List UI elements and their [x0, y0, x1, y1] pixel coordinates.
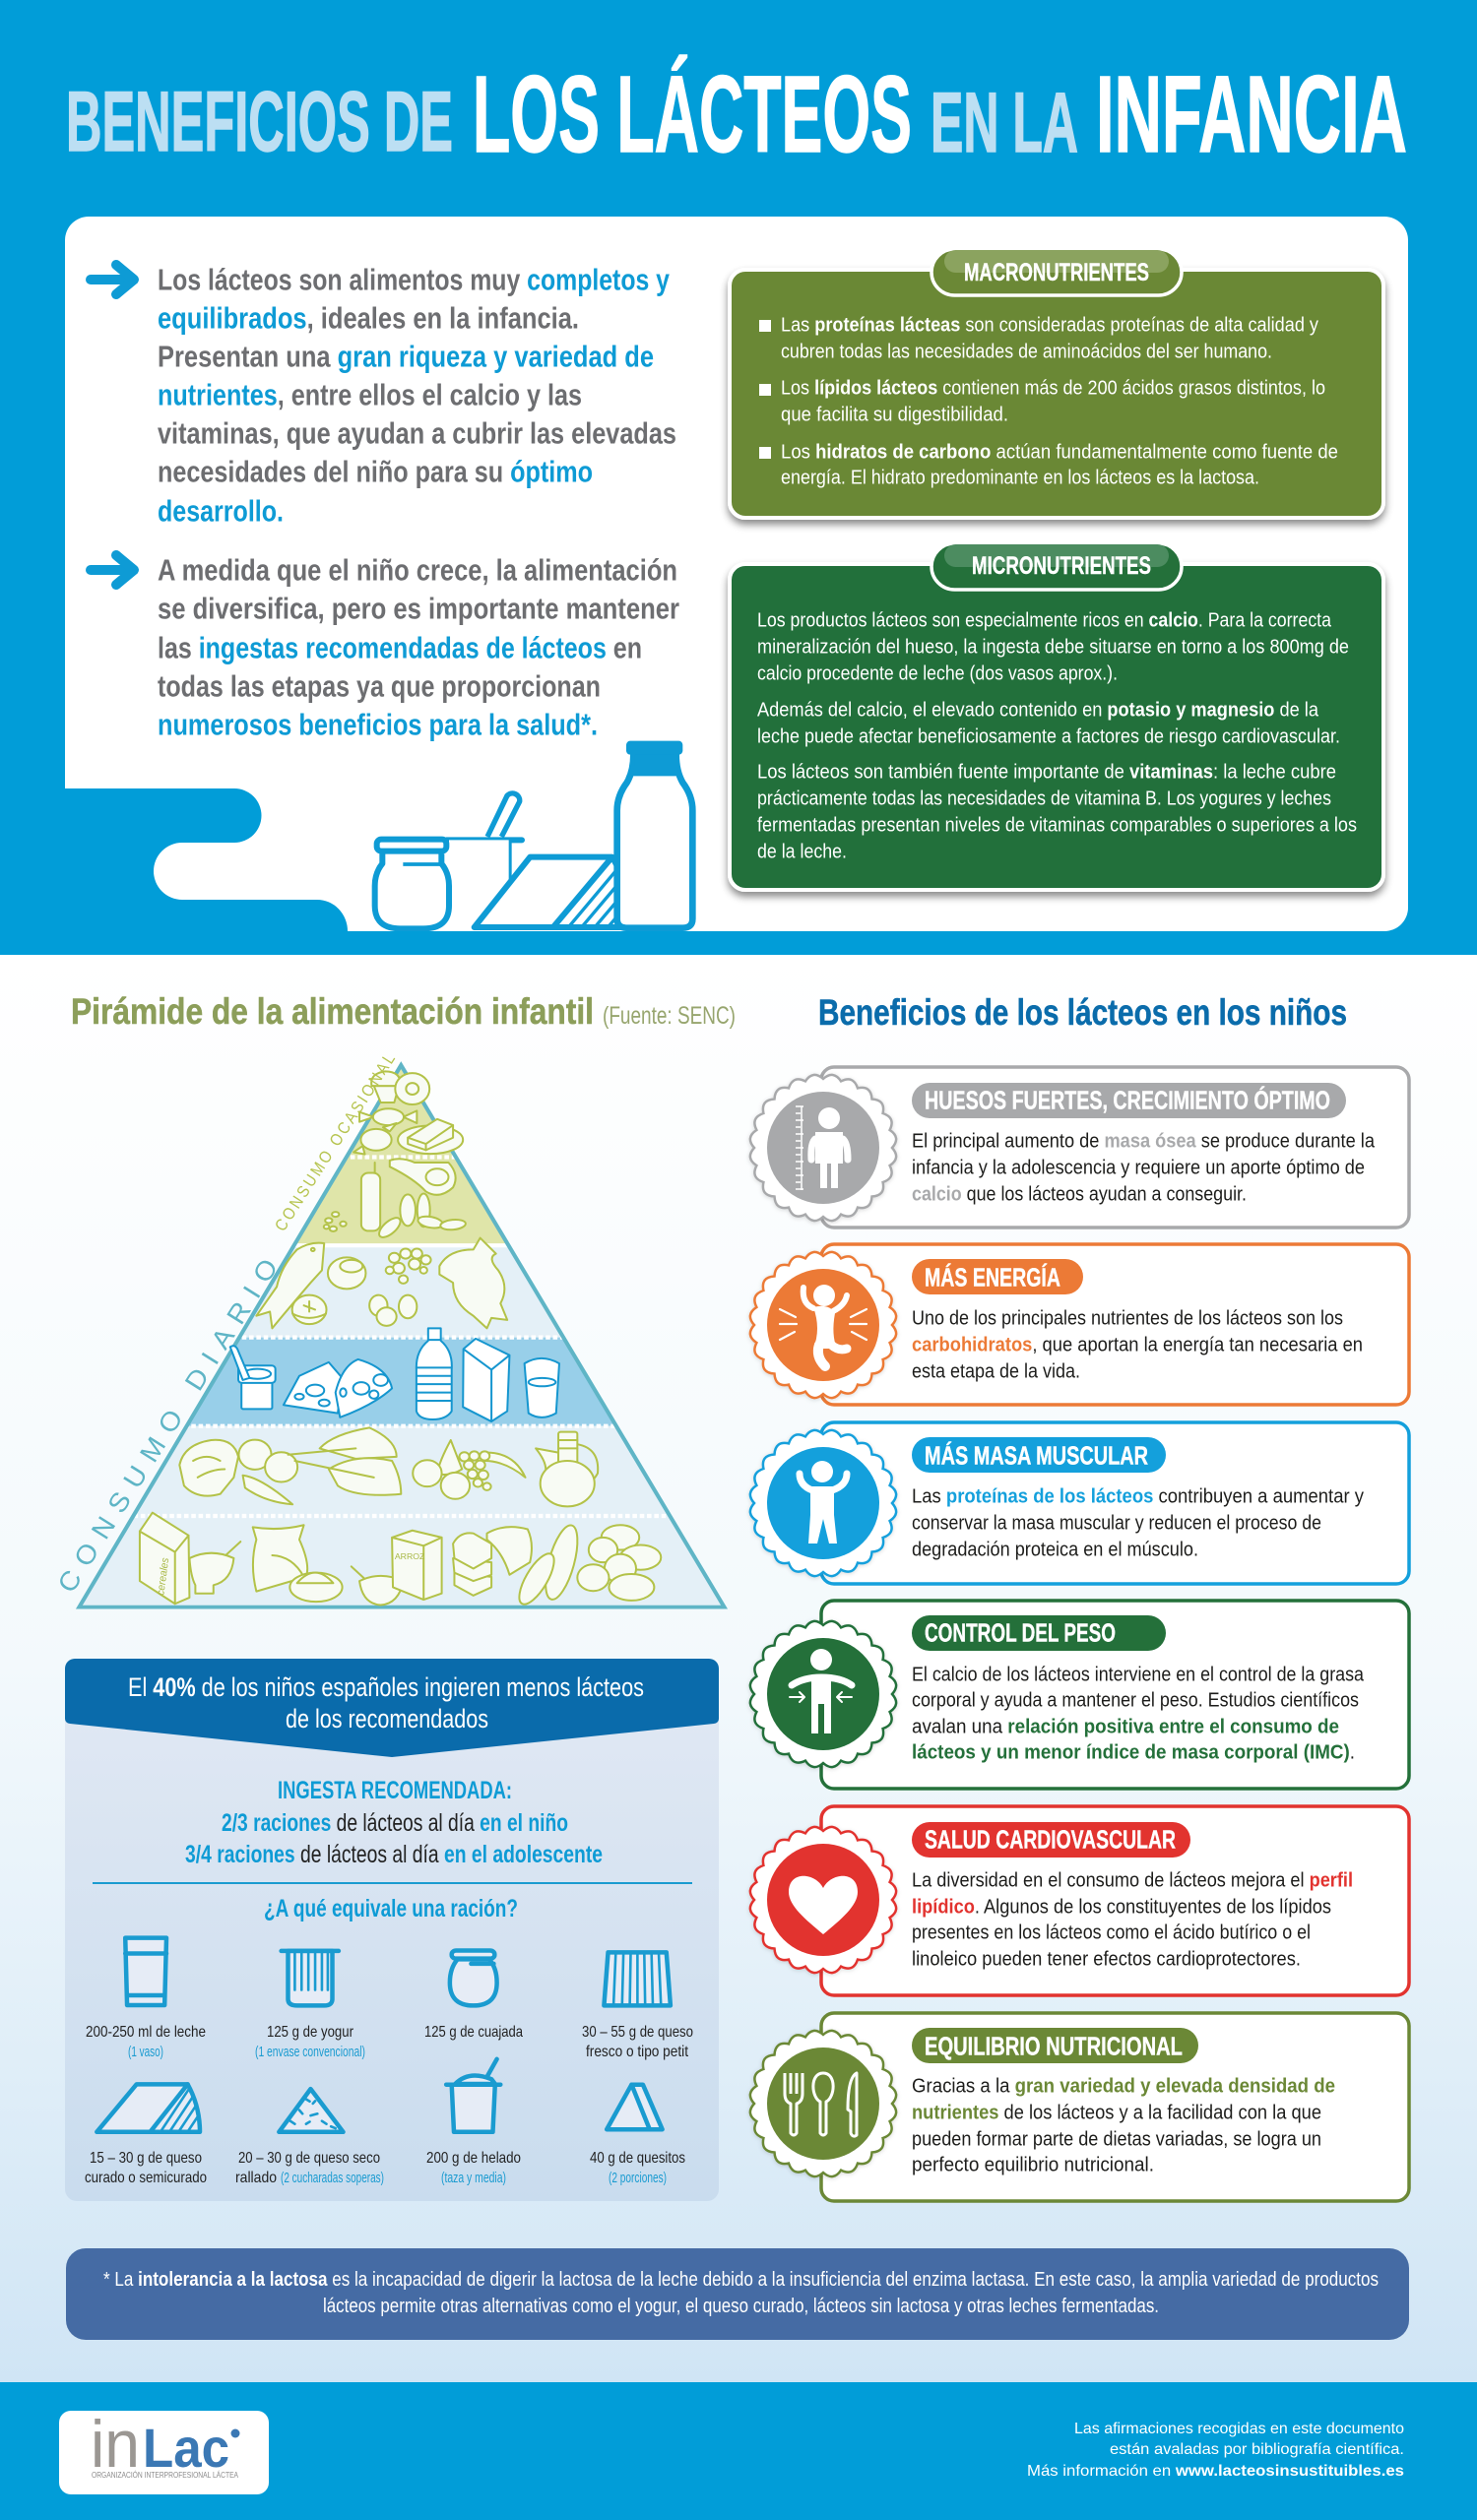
badge: corazón: [750, 1827, 896, 1973]
pill: muscular: [912, 1437, 1166, 1473]
label: consumo diario: CONSUMO DIARIO: [52, 1245, 289, 1598]
pill: peso: CONTROL DEL PESO: [925, 1617, 1116, 1647]
icon: jar: [450, 1951, 497, 2005]
serving labels: (2 cucharadas soperas): [281, 2170, 384, 2186]
heading: ración: ¿A qué equivale una ración?: [264, 1895, 518, 1922]
pill: cardiovascular: SALUD CARDIOVASCULAR: [925, 1824, 1176, 1854]
title: EN LA: [931, 76, 1078, 170]
icon: yogurt: [282, 1951, 339, 2005]
micronutrientes text: de la leche.: [757, 841, 847, 862]
text: energía: esta etapa de la vida.: [912, 1360, 1080, 1382]
text: huesos: [912, 1130, 1376, 1205]
pill: huesos: [912, 1083, 1346, 1118]
logo: inlac: ORGANIZACIÓN INTERPROFESIONAL LÁCTEA: [92, 2471, 239, 2480]
icon: grated cheese: [279, 2089, 344, 2132]
micronutrientes text: Además del calcio, el elevado contenido en potasio y magnesio de la: [757, 699, 1319, 721]
card: huesos fuertes: [750, 1067, 1409, 1228]
label: cereales box: cereales: [155, 1556, 172, 1596]
badge: huesos: [750, 1075, 896, 1221]
macronutrientes list: que facilita su digestibilidad.: [781, 404, 1008, 425]
micronutrientes text: calcio procedente de leche (dos vasos aprox.).: [757, 663, 1118, 685]
icon: quesito: [607, 2085, 663, 2129]
serving labels: 20 – 30 g de queso seco: [238, 2150, 380, 2167]
intro paragraph two: [158, 553, 679, 742]
text: energía: Uno de los principales nutrientes de los lácteos son los: [912, 1307, 1343, 1329]
label: consumo ocasional: CONSUMO OCASIONAL: [271, 1048, 400, 1234]
pill: cardiovascular: [912, 1822, 1190, 1858]
pill: micronutrientes: MICRONUTRIENTES: [972, 552, 1151, 580]
logo: inlac: Lac: [143, 2417, 229, 2479]
macronutrientes list: [759, 315, 1338, 488]
badge: peso: [750, 1621, 896, 1767]
text: muscular: [912, 1486, 1364, 1561]
text: equilibrio: Gracias a la gran variedad y elevada densidad de: [912, 2075, 1335, 2097]
banner: 40%: El 40% de los niños españoles ingieren menos lácteos: [128, 1672, 644, 1702]
pill: macronutrientes: MACRONUTRIENTES: [964, 259, 1149, 286]
text: cardiovascular: lipídico. Algunos de los constituyentes de los lípidos: [912, 1896, 1331, 1918]
text: huesos: infancia y la adolescencia y requiere un aporte óptimo de: [912, 1158, 1365, 1179]
icon: arrow one: [91, 265, 134, 294]
micronutrientes text: prácticamente todas las necesidades de vitamina B. Los yogures y leches: [757, 788, 1331, 809]
heading: pirámide: (Fuente: SENC): [603, 1002, 736, 1030]
macronutrientes list: Las proteínas lácteas son consideradas proteínas de alta calidad y: [781, 315, 1318, 337]
title: LOS LÁCTEOS: [473, 54, 912, 175]
heading: pirámide: Pirámide de la alimentación infantil: [71, 991, 594, 1032]
foods: fish, eggs, poultry: [256, 1238, 507, 1328]
serving icons: [96, 1938, 671, 2134]
text: muscular: conservar la masa muscular y reducen el proceso de: [912, 1512, 1321, 1534]
text: cardiovascular: presentes en los lácteos como el ácido butírico o el: [912, 1922, 1311, 1943]
text: peso: corporal y ayuda a mantener el peso. Estudios científicos: [912, 1689, 1359, 1711]
serving labels: 200 g de helado: [426, 2150, 521, 2167]
footer note: Más información en www.lacteosinsustituibles.es: [1027, 2463, 1404, 2480]
badge: muscular: [750, 1430, 896, 1576]
text: cardiovascular: La diversidad en el consumo de lácteos mejora el perfil: [912, 1870, 1353, 1892]
serving labels: (1 envase convencional): [255, 2044, 365, 2060]
pill: muscular: MÁS MASA MUSCULAR: [925, 1440, 1148, 1470]
text: peso: El calcio de los lácteos interviene en el control de la grasa: [912, 1664, 1365, 1685]
micronutrientes text: leche puede afectar beneficiosamente a factores de riesgo cardiovascular.: [757, 726, 1340, 748]
text: peso: lácteos y un menor índice de masa corporal (IMC).: [912, 1742, 1355, 1764]
bottom edge fill under illustration: [345, 931, 1329, 955]
text: equilibrio: pueden formar parte de dietas variadas, se logra un: [912, 2128, 1321, 2150]
serving labels: 125 g de yogur: [267, 2024, 354, 2041]
pill: energía: MÁS ENERGÍA: [925, 1262, 1060, 1292]
card: control del peso: [750, 1601, 1409, 1789]
serving labels: rallado: [235, 2170, 277, 2186]
macronutrientes list: Los lípidos lácteos contienen más de 200 ácidos grasos distintos, lo: [781, 378, 1325, 400]
text: huesos: El principal aumento de masa ósea se produce durante la: [912, 1130, 1376, 1152]
intro paragraph two: numerosos beneficios para la salud*.: [158, 707, 598, 742]
text: equilibrio: perfecto equilibrio nutricional.: [912, 2154, 1154, 2175]
serving labels: fresco o tipo petit: [586, 2044, 688, 2060]
serving labels: [85, 2024, 693, 2186]
ingesta recomendada: INGESTA RECOMENDADA:: [278, 1777, 512, 1804]
icon: fresh cheese: [604, 1952, 671, 2005]
text: equilibrio: [912, 2075, 1335, 2175]
micronutrientes text: Los lácteos son también fuente importante de vitaminas: la leche cubre: [757, 762, 1336, 784]
chart: food pyramid: [39, 1063, 763, 1608]
intro paragraph two: A medida que el niño crece, la alimentación: [158, 553, 677, 587]
intro paragraph two: se diversifica, pero es importante mantener: [158, 591, 679, 626]
title: BENEFICIOS DE: [66, 75, 453, 169]
panel: intro white card: [65, 217, 1408, 931]
ingesta recomendada: [185, 1777, 603, 1868]
micronutrientes text: Los productos lácteos son especialmente ricos en calcio. Para la correcta: [757, 610, 1332, 632]
logo: inlac: in: [91, 2407, 140, 2482]
text: peso: [912, 1664, 1365, 1764]
pill: energía: [912, 1259, 1083, 1294]
callout: intolerancia a la lactosa: lácteos permite otras alternativas como el yogur, el queso curado, lácteos sin lactosa y otras leches fermentadas.: [323, 2296, 1159, 2317]
badge: energía: [750, 1252, 896, 1398]
intro paragraph one: [158, 262, 676, 528]
callout: intolerancia a la lactosa: [66, 2248, 1409, 2340]
card: equilibrio nutricional: [750, 2013, 1409, 2201]
text: energía: [912, 1307, 1363, 1382]
intro paragraph one: necesidades del niño para su óptimo: [158, 455, 593, 488]
text: muscular: Las proteínas de los lácteos contribuyen a aumentar y: [912, 1486, 1364, 1508]
pill: equilibrio: [912, 2028, 1198, 2063]
text: huesos: calcio que los lácteos ayudan a conseguir.: [912, 1183, 1247, 1205]
title: [66, 54, 1407, 175]
icon: ice cream cup: [446, 2059, 500, 2132]
intro paragraph two: todas las etapas ya que proporcionan: [158, 669, 601, 703]
footer note: Las afirmaciones recogidas en este documento: [1074, 2421, 1404, 2437]
footer note: [1027, 2421, 1404, 2480]
pill: equilibrio: EQUILIBRIO NUTRICIONAL: [925, 2031, 1183, 2060]
text: cardiovascular: [912, 1870, 1353, 1971]
text: muscular: degradación proteica en el músculo.: [912, 1540, 1198, 1561]
banner: 40%: [65, 1659, 719, 1757]
intro paragraph one: desarrollo.: [158, 494, 284, 528]
illustration: dairy products: [375, 741, 692, 932]
intro paragraph one: nutrientes, entre ellos el calcio y las: [158, 378, 582, 411]
intro paragraph one: vitaminas, que ayudan a cubrir las elevadas: [158, 415, 676, 451]
heading: beneficios: Beneficios de los lácteos en los niños: [818, 992, 1347, 1033]
macronutrientes list: cubren todas las necesidades de aminoácidos del ser humano.: [781, 341, 1272, 362]
foods: vegetables, fruit, oil: [179, 1427, 598, 1506]
decorative wave at panel bottom left: [65, 788, 348, 931]
footer band: [0, 2382, 1477, 2520]
serving labels: 15 – 30 g de queso: [90, 2150, 202, 2167]
micronutrientes text: [757, 610, 1357, 862]
pyramid bands: [83, 1069, 721, 1605]
foods: dairy: [230, 1328, 559, 1421]
foods: sweets and fats: [353, 1071, 463, 1155]
serving labels: 125 g de cuajada: [424, 2024, 523, 2041]
ingesta recomendada: 2/3 raciones de lácteos al día en el niño: [222, 1809, 568, 1837]
intro paragraph one: Presentan una gran riqueza y variedad de: [158, 339, 654, 374]
card: más energía: [750, 1244, 1409, 1405]
icon: wedge: [95, 2082, 203, 2134]
pill: macronutrientes: [931, 249, 1182, 295]
logo: inlac: [59, 2407, 269, 2494]
serving labels: 40 g de quesitos: [590, 2150, 685, 2167]
pill: huesos: HUESOS FUERTES, CRECIMIENTO ÓPTIMO: [925, 1085, 1330, 1114]
intro paragraph one: Los lácteos son alimentos muy completos y: [158, 262, 671, 297]
header band: [0, 0, 1477, 955]
card: más masa muscular: [750, 1422, 1409, 1584]
serving labels: 30 – 55 g de queso: [582, 2024, 693, 2041]
serving labels: curado o semicurado: [85, 2170, 207, 2186]
icon: glass: [125, 1938, 166, 2005]
macronutrientes list: energía. El hidrato predominante en los lácteos es la lactosa.: [781, 467, 1259, 488]
micronutrientes text: mineralización del hueso, la ingesta debe situarse en torno a los 800mg de: [757, 636, 1349, 658]
panel: micronutrientes: [730, 543, 1383, 890]
intro paragraph two: las ingestas recomendadas de lácteos en: [158, 630, 642, 665]
serving labels: (2 porciones): [609, 2170, 667, 2186]
text: equilibrio: nutrientes de los lácteos y a la facilidad con la que: [912, 2103, 1321, 2124]
micronutrientes text: fermentadas presentan niveles de vitaminas comparables o superiores a los: [757, 815, 1357, 837]
text: peso: avalan una relación positiva entre el consumo de: [912, 1717, 1339, 1738]
foods: meats: [324, 1159, 466, 1240]
text: cardiovascular: linoleico pueden tener efectos cardioprotectores.: [912, 1949, 1301, 1971]
footer note: están avaladas por bibliografía científica.: [1110, 2441, 1404, 2458]
page background: [0, 955, 1477, 2382]
panel: raciones: [65, 1659, 719, 2201]
macronutrientes list: Los hidratos de carbono actúan fundamentalmente como fuente de: [781, 441, 1338, 463]
text: energía: carbohidratos, que aportan la energía tan necesaria en: [912, 1335, 1363, 1356]
banner: 40%: de los recomendados: [286, 1704, 488, 1733]
intro paragraph one: equilibrados, ideales en la infancia.: [158, 301, 579, 335]
label: arroz box: ARROZ: [395, 1551, 424, 1561]
panel: macronutrientes: [730, 249, 1383, 518]
serving labels: 200-250 ml de leche: [86, 2024, 206, 2041]
card: salud cardiovascular: [750, 1806, 1409, 1995]
foods: cereals, bread, potatoes: [140, 1513, 661, 1608]
serving labels: (1 vaso): [128, 2044, 163, 2060]
badge: cubiertos: [750, 2031, 896, 2176]
serving labels: (taza y media): [441, 2170, 506, 2186]
pill: micronutrientes: [931, 543, 1182, 590]
ingesta recomendada: 3/4 raciones de lácteos al día en el adolescente: [185, 1841, 603, 1868]
icon: arrow two: [91, 555, 134, 585]
